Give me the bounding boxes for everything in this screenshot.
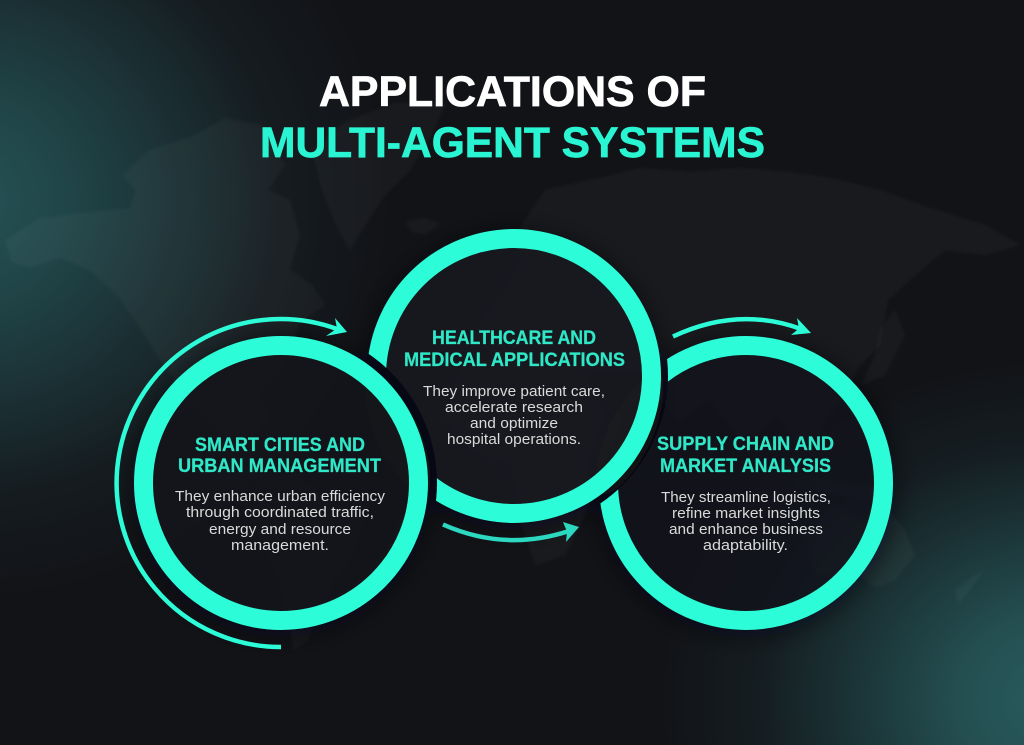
heading: smart cities (178, 434, 381, 477)
text: supply chain description: and enhance business (669, 521, 823, 538)
map: Africa (445, 355, 625, 565)
text: healthcare description: hospital operations. (447, 431, 581, 448)
arrow: around smart cities circle (117, 318, 347, 647)
text: healthcare description: accelerate research (445, 399, 583, 416)
heading: supply chain (657, 433, 834, 477)
text: supply chain description (661, 489, 831, 554)
heading: supply chain: SUPPLY CHAIN AND (657, 433, 834, 455)
heading: supply chain: MARKET ANALYSIS (660, 455, 831, 477)
circle ring: right (608, 346, 884, 620)
panel: smart cities and urban management (144, 346, 418, 620)
arrow: healthcare to supply chain (443, 522, 579, 542)
text: supply chain description: refine market insights (672, 505, 820, 522)
text: smart cities description: They enhance urban efficiency (175, 488, 386, 505)
text: smart cities description: through coordinated traffic, (186, 504, 374, 521)
heading: healthcare: MEDICAL APPLICATIONS (404, 349, 625, 371)
map: Greenland (312, 103, 445, 250)
text: smart cities description: management. (231, 537, 329, 554)
heading: healthcare: HEALTHCARE AND (432, 327, 596, 349)
text: smart cities description (175, 488, 386, 554)
text: smart cities description: energy and resource (209, 521, 351, 538)
circle ring: center (376, 238, 652, 514)
world map background (5, 103, 1020, 650)
map: Iceland (405, 218, 440, 234)
heading: smart cities: SMART CITIES AND (195, 434, 365, 456)
title (260, 68, 765, 167)
text: supply chain description: They streamline logistics, (661, 489, 831, 506)
text: healthcare description: They improve patient care, (423, 383, 605, 400)
title line 2: MULTI-AGENT SYSTEMS (260, 119, 765, 167)
map: Japan (862, 310, 905, 385)
map: Eurasia (470, 168, 1020, 460)
map: South America (246, 478, 362, 650)
panel: supply chain and market analysis (608, 346, 884, 620)
heading: smart cities: URBAN MANAGEMENT (178, 455, 381, 477)
heading: healthcare (404, 327, 625, 371)
text: healthcare description: and optimize (470, 415, 558, 432)
map: Australia (805, 500, 915, 588)
circle ring: left (144, 346, 418, 620)
panel: healthcare and medical applications (376, 238, 652, 514)
title line 1: APPLICATIONS OF (319, 68, 706, 116)
map: New Zealand (955, 568, 985, 605)
shadows beneath circles (131, 230, 896, 637)
text: healthcare description (423, 383, 605, 448)
map: North America (5, 118, 325, 478)
map: Indonesia (790, 470, 885, 500)
text: supply chain description: adaptability. (703, 537, 788, 554)
arrow: over supply chain circle (673, 318, 811, 336)
